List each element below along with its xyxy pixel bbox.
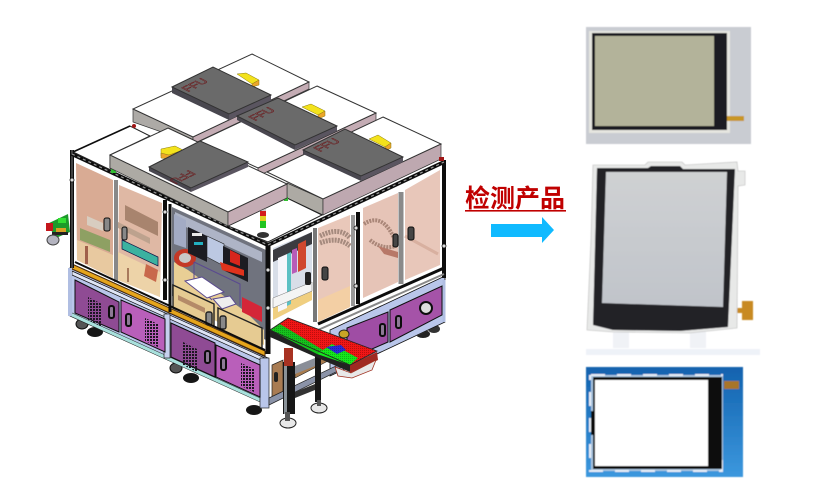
machine illustration (46, 54, 446, 428)
FFU unit rear centre: FFU (245, 106, 279, 122)
top left white panel (73, 124, 150, 173)
product photo 3 (586, 367, 743, 477)
FFU unit rear right: FFU (310, 137, 344, 153)
left glass doors (76, 163, 162, 297)
white ledge with tower light (228, 197, 322, 242)
conveyor belt (270, 318, 378, 378)
FFU unit front: FFU (165, 169, 199, 185)
yellow fan boxes (161, 73, 391, 159)
cabinet vents (88, 297, 254, 392)
product photo 1 (586, 27, 751, 144)
FFU unit front (149, 141, 248, 192)
heading: inspected products: 检测产品 (465, 185, 565, 213)
front left ceiling panel (110, 128, 287, 226)
FFU unit rear left (172, 67, 271, 120)
FFU unit rear centre (237, 98, 337, 150)
FFU unit rear left: FFU (178, 77, 212, 93)
aluminium frame posts and rails (70, 150, 446, 354)
centre open bay with mechanism (172, 207, 266, 345)
base frame (70, 264, 445, 408)
centre lower doors (173, 285, 262, 349)
rear ceiling panel (133, 54, 309, 144)
rear right ceiling panel (200, 86, 376, 176)
feet (76, 319, 440, 415)
cabinet handles (109, 302, 432, 370)
left side accessory (46, 214, 70, 245)
conveyor stand (280, 348, 327, 428)
purple cabinet doors (75, 280, 442, 397)
front right ceiling panel (267, 117, 444, 215)
right glass doors (318, 170, 440, 322)
product photo 2 (586, 162, 760, 355)
arrow pointing to products (491, 217, 554, 243)
FFU unit rear right (303, 129, 403, 181)
right small door (273, 232, 312, 320)
